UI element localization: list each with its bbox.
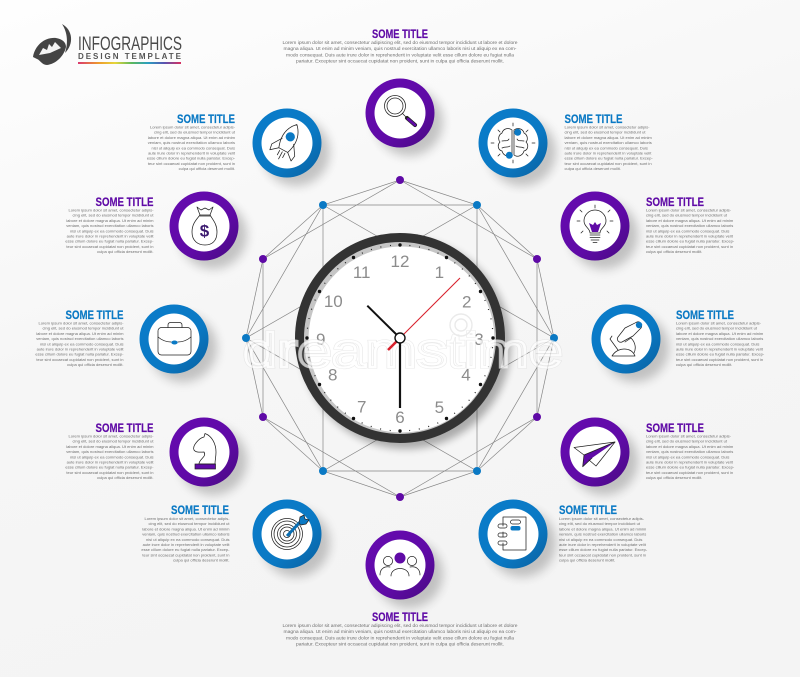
text block: veniam, quis nostrud exercitation ullamco laboris <box>559 532 646 537</box>
text block: teur sint occaecat cupidatat non proident, sunt in <box>559 552 646 557</box>
icon badge: rocket <box>252 108 330 186</box>
text block: culpa qui officia deserunt mollit. <box>173 558 230 563</box>
text block: modo consequat. Duis aute irure dolor in reprehenderit in voluptate velit esse cillum dolore eu fugiat nulla <box>286 52 514 58</box>
watermark <box>243 314 563 378</box>
heading: SOME TITLE <box>646 421 704 435</box>
text block: labore et dolore magna aliqua. Ut enim ad minim <box>676 331 764 336</box>
clock numbers: 10 <box>324 292 343 311</box>
text block: veniam, quis nostrud exercitation ullamco laboris <box>564 140 652 145</box>
panel: step brain <box>478 108 653 186</box>
text block: cing elit, sed do eiusmod tempor incididunt ut <box>73 213 154 218</box>
icon badge: money bag: $ <box>200 222 210 240</box>
clock numbers: 12 <box>391 252 409 271</box>
panel: step money bag <box>65 192 247 269</box>
heading: SOME TITLE <box>171 503 229 517</box>
heading: SOME TITLE <box>559 503 617 517</box>
panel: step rocket <box>147 108 330 186</box>
text block: cing elit, sed do eiusmod tempor incididunt ut <box>73 439 154 444</box>
text block: labore et dolore magna aliqua. Ut enim ad minim <box>66 218 154 223</box>
text block: teur sint occaecat cupidatat non proident, sunt in <box>564 161 652 166</box>
text block: Lorem ipsum dolor sit amet, consectetur adipis- <box>150 124 236 130</box>
text block: pariatur. Excepteur sint occaecat cupidatat non proident, sunt in culpa qui officia deserunt mollit. <box>296 642 504 648</box>
text block: teur sint occaecat cupidatat non proident, sunt in <box>676 357 763 362</box>
rainbow underline <box>78 62 181 64</box>
text block: cing elit, sed do eiusmod tempor incididunt ut <box>646 213 728 218</box>
text block: Lorem ipsum dolor sit amet, consectetur adipis- <box>676 320 762 326</box>
text block: teur sint occaecat cupidatat non proident, sunt in <box>66 470 154 475</box>
text block: esse cillum dolore eu fugiat nulla pariatur. Excep- <box>35 352 124 357</box>
text block: nisi ut aliquip ex ea commodo consequat. Duis <box>646 228 729 233</box>
clock hands <box>367 278 460 408</box>
clock numbers: 3 <box>474 330 484 349</box>
text block: culpa qui officia deserunt mollit. <box>97 249 154 254</box>
text block: teur sint occaecat cupidatat non proident, sunt in <box>36 357 124 362</box>
text block: esse cillum dolore eu fugiat nulla pariatur. Excep- <box>646 465 735 470</box>
text block: aute irure dolor in reprehenderit in voluptate velit <box>564 150 652 156</box>
text block: Lorem ipsum dolor sit amet, consectetur adipis- <box>646 208 732 212</box>
text block: culpa qui officia deserunt mollit. <box>179 166 235 171</box>
text block: veniam, quis nostrud exercitation ullamco laboris <box>142 532 230 537</box>
clock numbers: 4 <box>461 366 471 384</box>
text block: aute irure dolor in reprehenderit in voluptate velit <box>67 460 154 464</box>
text block: aute irure dolor in reprehenderit in voluptate velit <box>143 542 230 547</box>
icon badge: light bulb <box>560 192 638 269</box>
panel: bottom step team <box>282 530 518 648</box>
text block: esse cillum dolore eu fugiat nulla pariatur. Excep- <box>147 156 236 161</box>
heading: SOME TITLE <box>66 308 124 322</box>
panel: step target <box>141 500 330 577</box>
text block: Lorem ipsum dolor sit amet, consectetur adipis- <box>559 516 645 521</box>
text block: cing elit, sed do eiusmod tempor incididunt ut <box>676 326 758 331</box>
text block: pariatur. Excepteur sint occaecat cupidatat non proident, sunt in culpa qui officia deserunt mollit. <box>296 59 504 65</box>
text block: culpa qui officia deserunt mollit. <box>67 362 124 367</box>
heading: SOME TITLE <box>96 195 154 209</box>
clock numbers: 8 <box>328 366 337 384</box>
text block: esse cillum dolore eu fugiat nulla pariatur. Excep- <box>65 465 154 470</box>
text block: aute irure dolor in reprehenderit in voluptate velit <box>646 460 734 464</box>
text block: modo consequat. Duis aute irure dolor in reprehenderit in voluptate velit esse cillum dolore eu fugiat nulla <box>286 635 514 641</box>
text block: veniam, quis nostrud exercitation ullamco laboris <box>676 336 763 341</box>
text block: cing elit, sed do eiusmod tempor incididunt ut <box>154 130 236 135</box>
text block: Lorem ipsum dolor sit amet, consectetur adipis- <box>68 208 154 212</box>
text block: culpa qui officia deserunt mollit. <box>564 166 621 171</box>
text block: labore et dolore magna aliqua. Ut enim ad minim <box>559 526 647 531</box>
logo <box>33 24 182 65</box>
icon badge: chess knight <box>170 418 247 495</box>
text block: teur sint occaecat cupidatat non proident, sunt in <box>142 552 230 557</box>
clock numbers: 2 <box>462 292 471 312</box>
text block: esse cillum dolore eu fugiat nulla pariatur. Excep- <box>646 239 735 244</box>
panel: step microscope <box>592 304 765 382</box>
clock numbers: 6 <box>395 408 405 427</box>
network diagram <box>242 176 558 501</box>
text block: labore et dolore magna aliqua. Ut enim ad minim <box>564 135 652 140</box>
text block: magna aliqua. Ut enim ad minim veniam, quis nostrud exercitation ullamco laboris nisi ut aliquip ex ea com- <box>284 46 517 52</box>
text block: nisi ut aliquip ex ea commodo consequat. Duis <box>676 341 759 346</box>
logo title: INFOGRAPHICS <box>78 34 182 55</box>
heading: SOME TITLE <box>96 421 154 435</box>
text block: esse cillum dolore eu fugiat nulla pariatur. Excep- <box>141 547 230 552</box>
text block: labore et dolore magna aliqua. Ut enim ad minim <box>66 444 154 449</box>
text block: labore et dolore magna aliqua. Ut enim ad minim <box>36 331 124 336</box>
text block: Lorem ipsum dolor sit amet, consectetur adipis- <box>646 434 732 438</box>
text block: labore et dolore magna aliqua. Ut enim ad minim <box>646 218 734 223</box>
text block: esse cillum dolore eu fugiat nulla pariatur. Excep- <box>676 352 765 357</box>
text block: Lorem ipsum dolor sit amet, consectetur adipis- <box>564 124 650 130</box>
text block: veniam, quis nostrud exercitation ullamco laboris <box>646 223 733 228</box>
heading: SOME TITLE <box>372 610 428 624</box>
icon badge: magnifier <box>366 78 443 156</box>
icon badge: target <box>252 500 330 577</box>
text block: labore et dolore magna aliqua. Ut enim ad minim <box>646 444 734 449</box>
text block: teur sint occaecat cupidatat non proident, sunt in <box>646 470 733 475</box>
icon badge: notebook <box>478 500 556 577</box>
panel: top step search <box>282 27 518 156</box>
text block: veniam, quis nostrud exercitation ullamco laboris <box>36 336 124 341</box>
text block: labore et dolore magna aliqua. Ut enim ad minim <box>148 135 236 140</box>
text block: aute irure dolor in reprehenderit in voluptate velit <box>67 234 154 238</box>
icon badge: money bag <box>170 192 247 269</box>
icon badge: team <box>366 530 443 608</box>
panel: step chess knight <box>65 418 247 495</box>
text block: nisi ut aliquip ex ea commodo consequat. Duis <box>146 537 230 542</box>
text block: Lorem ipsum dolor sit amet, consectetur adipis- <box>144 516 230 521</box>
text block: aute irure dolor in reprehenderit in voluptate velit <box>148 150 236 156</box>
text block: nisi ut aliquip ex ea commodo consequat. Duis <box>70 228 154 233</box>
text block: nisi ut aliquip ex ea commodo consequat. Duis <box>564 145 648 150</box>
text block: nisi ut aliquip ex ea commodo consequat. Duis <box>152 145 235 150</box>
panel: step briefcase <box>35 304 217 382</box>
text block: esse cillum dolore eu fugiat nulla pariatur. Excep- <box>564 156 653 161</box>
text block: nisi ut aliquip ex ea commodo consequat. Duis <box>40 341 124 346</box>
text block: Lorem ipsum dolor sit amet, consectetur adipiscing elit, sed do eiusmod tempor incididunt ut labore et dolore <box>282 623 518 629</box>
watermark: dreamstime <box>243 325 563 378</box>
text block: culpa qui officia deserunt mollit. <box>559 558 615 563</box>
icon badge: paper plane <box>560 418 638 495</box>
text block: nisi ut aliquip ex ea commodo consequat. Duis <box>70 454 154 459</box>
text block: aute irure dolor in reprehenderit in voluptate velit <box>676 346 764 352</box>
text block: aute irure dolor in reprehenderit in voluptate velit <box>37 346 124 352</box>
panel: step light bulb <box>560 192 735 269</box>
heading: SOME TITLE <box>177 112 235 126</box>
icon badge: microscope <box>592 304 669 382</box>
text block: veniam, quis nostrud exercitation ullamco laboris <box>646 449 733 454</box>
heading: SOME TITLE <box>646 195 704 209</box>
heading: SOME TITLE <box>564 112 622 126</box>
text block: culpa qui officia deserunt mollit. <box>646 249 702 254</box>
text block: Lorem ipsum dolor sit amet, consectetur adipiscing elit, sed do eiusmod tempor incididunt ut labore et dolore <box>282 40 518 46</box>
logo subtitle: DESIGN TEMPLATE <box>78 52 182 61</box>
heading: SOME TITLE <box>372 27 428 41</box>
text block: teur sint occaecat cupidatat non proident, sunt in <box>66 244 154 249</box>
text block: teur sint occaecat cupidatat non proident, sunt in <box>646 244 733 249</box>
text block: Lorem ipsum dolor sit amet, consectetur adipis- <box>68 434 154 438</box>
text block: culpa qui officia deserunt mollit. <box>97 475 154 480</box>
clock numbers: 5 <box>435 398 444 417</box>
clock numbers: 1 <box>435 263 444 282</box>
text block: veniam, quis nostrud exercitation ullamco laboris <box>66 449 154 454</box>
text block: magna aliqua. Ut enim ad minim veniam, quis nostrud exercitation ullamco laboris nisi ut aliquip ex ea com- <box>284 629 517 635</box>
heading: SOME TITLE <box>676 308 734 322</box>
clock numbers: 7 <box>357 398 366 416</box>
text block: aute irure dolor in reprehenderit in voluptate velit <box>559 542 647 547</box>
clock numbers: 11 <box>353 263 371 282</box>
clock <box>243 233 563 449</box>
text block: cing elit, sed do eiusmod tempor incididunt ut <box>149 521 230 526</box>
text block: cing elit, sed do eiusmod tempor incididunt ut <box>43 326 124 331</box>
text block: veniam, quis nostrud exercitation ullamco laboris <box>66 223 154 228</box>
text block: esse cillum dolore eu fugiat nulla pariatur. Excep- <box>65 239 154 244</box>
text block: culpa qui officia deserunt mollit. <box>676 362 732 367</box>
text block: aute irure dolor in reprehenderit in voluptate velit <box>646 234 734 238</box>
watermark: dreamstime <box>243 325 563 378</box>
text block: esse cillum dolore eu fugiat nulla pariatur. Excep- <box>559 547 648 552</box>
clock numbers <box>316 252 484 427</box>
text block: Lorem ipsum dolor sit amet, consectetur adipis- <box>38 320 124 326</box>
text block: cing elit, sed do eiusmod tempor incididunt ut <box>564 130 646 135</box>
text block: labore et dolore magna aliqua. Ut enim ad minim <box>142 526 230 531</box>
icon badge: brain <box>478 108 556 186</box>
text block: nisi ut aliquip ex ea commodo consequat. Duis <box>559 537 642 542</box>
icon badge: briefcase <box>140 304 217 382</box>
text block: cing elit, sed do eiusmod tempor incididunt ut <box>559 521 641 526</box>
text block: cing elit, sed do eiusmod tempor incididunt ut <box>646 439 728 444</box>
text block: culpa qui officia deserunt mollit. <box>646 475 702 480</box>
text block: veniam, quis nostrud exercitation ullamco laboris <box>148 140 235 145</box>
text block: teur sint occaecat cupidatat non proident, sunt in <box>148 161 235 166</box>
icon: leaf logo mark <box>33 24 71 65</box>
panel: step paper plane <box>560 418 735 495</box>
clock numbers: 9 <box>316 330 325 349</box>
panel: step notebook <box>478 500 648 577</box>
text block: nisi ut aliquip ex ea commodo consequat. Duis <box>646 454 729 459</box>
